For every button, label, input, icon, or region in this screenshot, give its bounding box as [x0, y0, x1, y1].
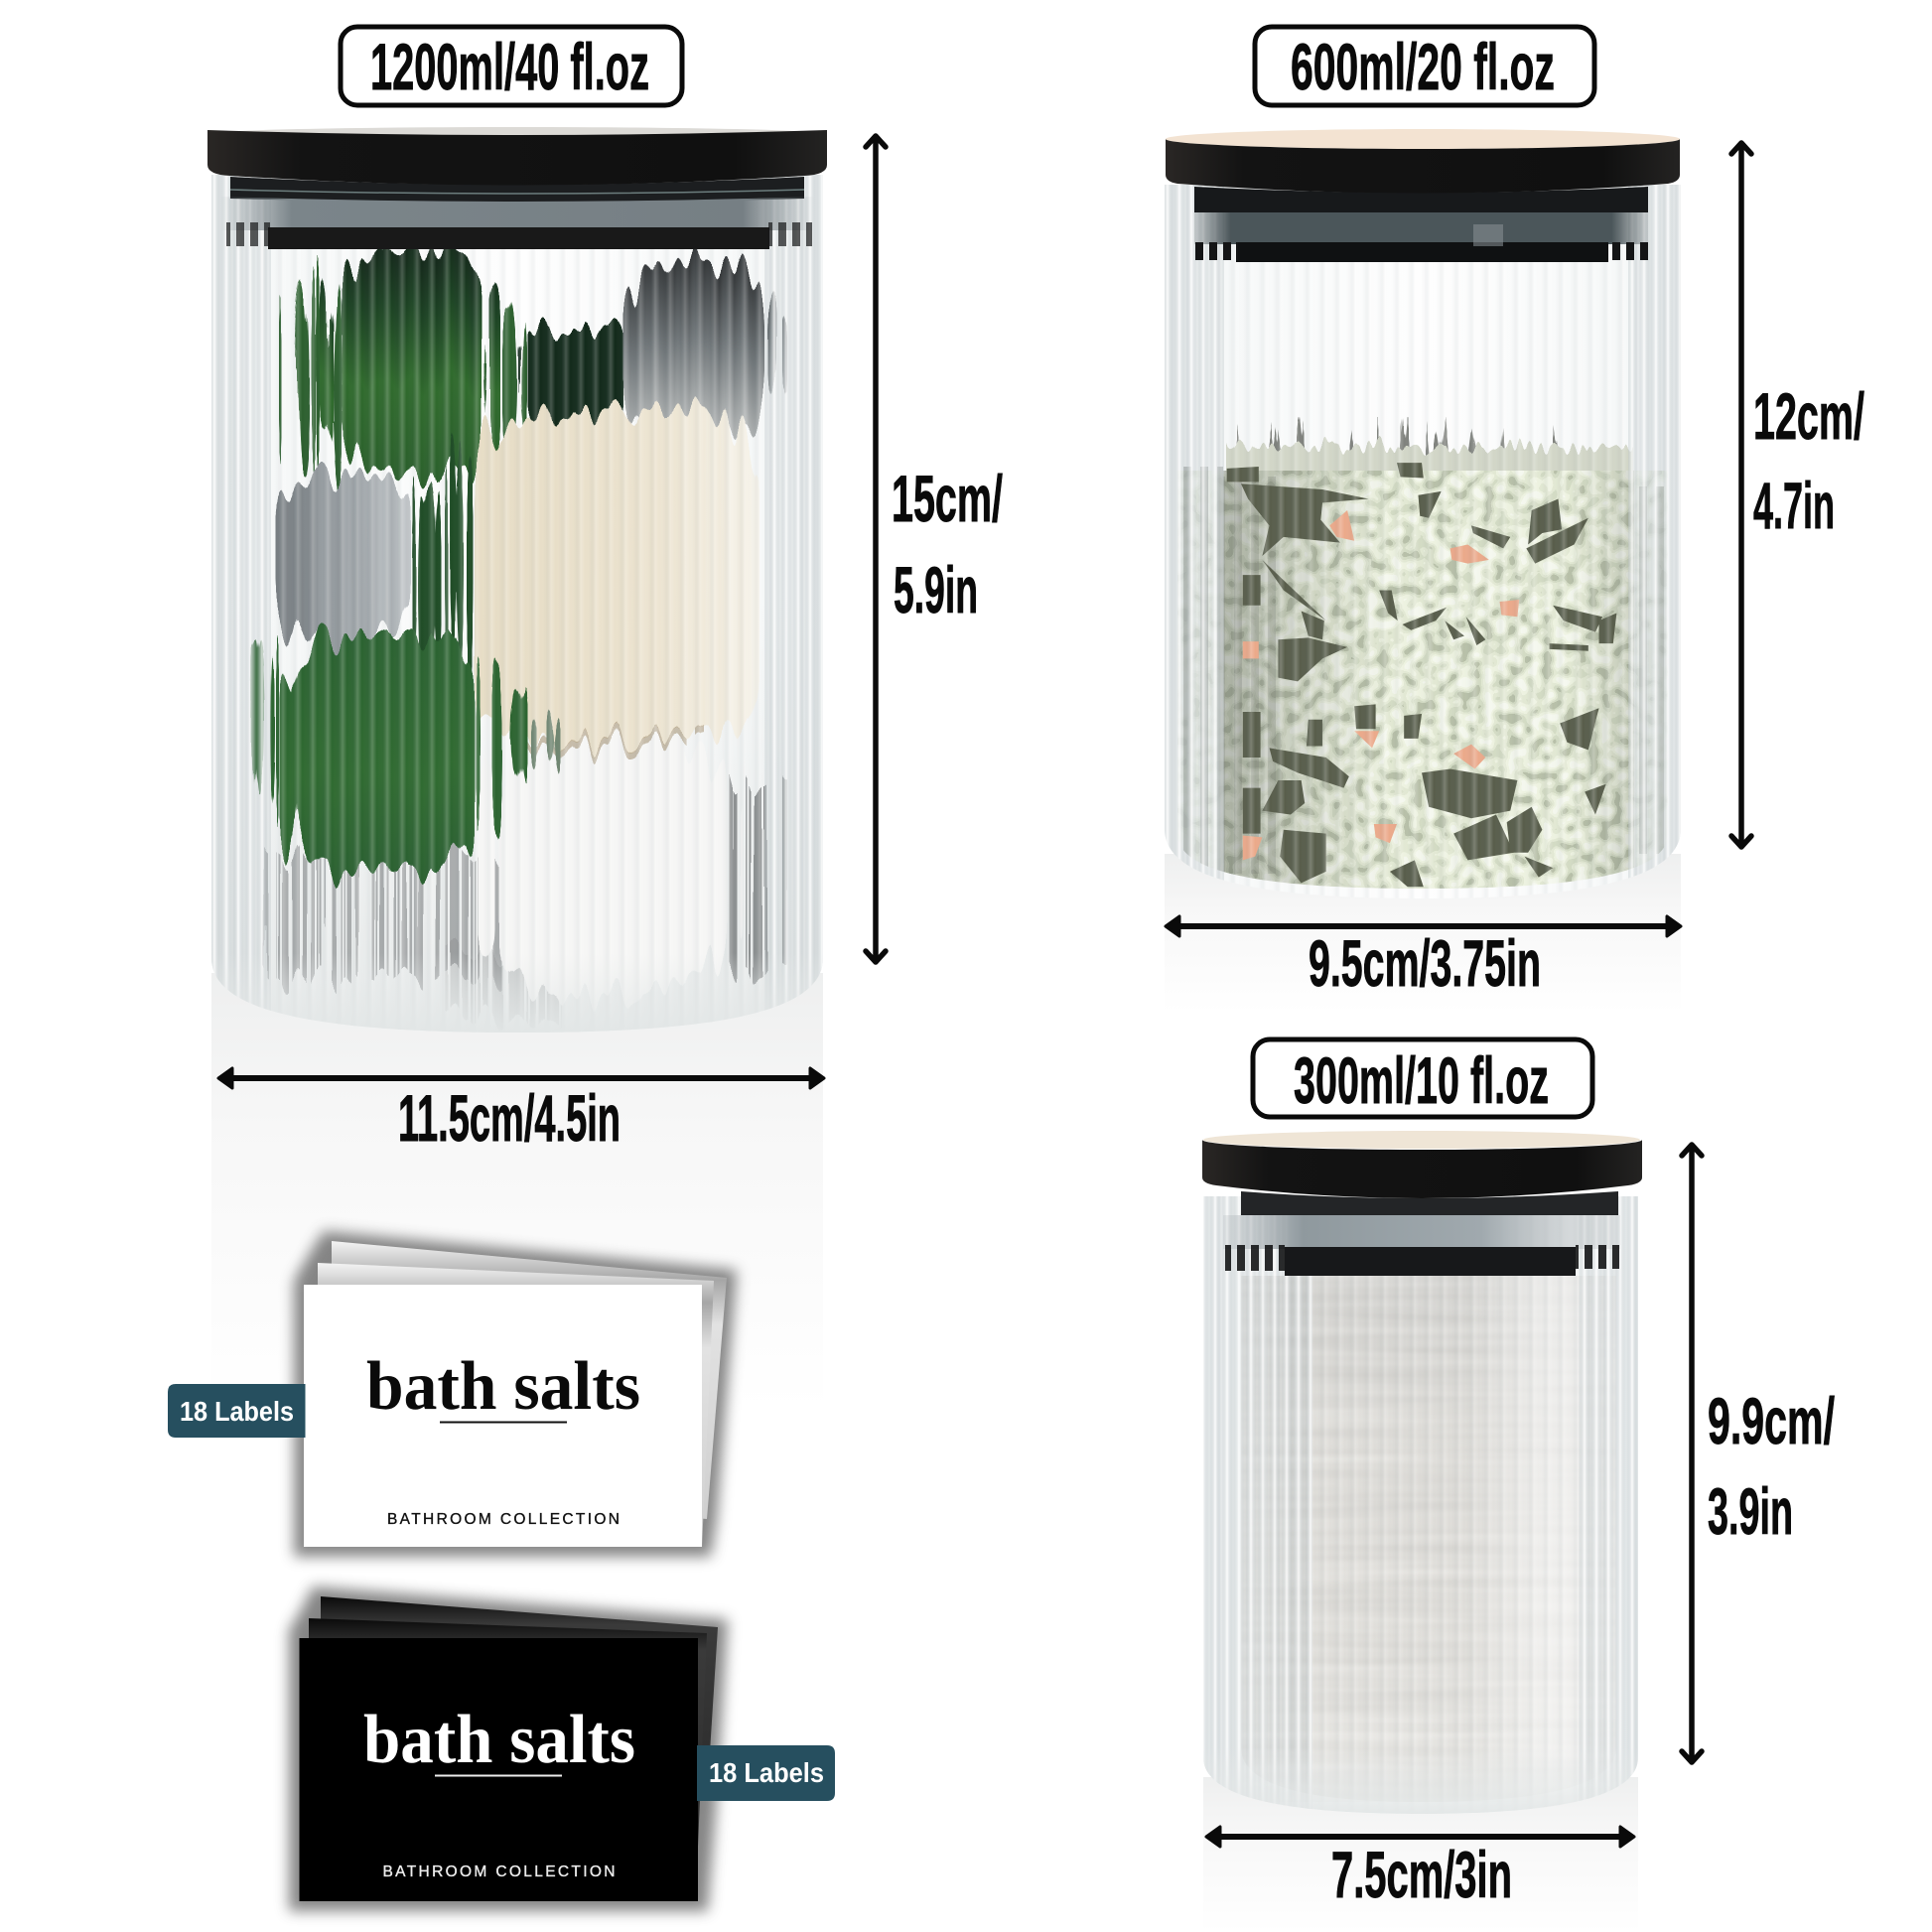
outer refracted salt	[1177, 471, 1223, 894]
tag: 18 labels white set: 18 Labels	[180, 1396, 294, 1427]
dimension: medium jar height: 4.7in	[1753, 469, 1835, 542]
large jar lid	[207, 127, 827, 185]
capacity label: 1200ml: 1200ml/40 fl.oz	[370, 30, 649, 103]
medium jar glass body	[1165, 185, 1681, 898]
back white card	[332, 1241, 727, 1519]
large jar glass body	[211, 175, 823, 1033]
dimension: small jar height	[1708, 1384, 1835, 1548]
dimension: large jar height	[892, 462, 1003, 626]
arrow: medium jar height	[1731, 143, 1751, 847]
middle black card	[309, 1618, 707, 1847]
back black card	[321, 1596, 718, 1799]
card title: bath salts	[363, 1702, 635, 1778]
salt herbs and pink grains	[1227, 463, 1616, 887]
small jar	[1202, 1131, 1642, 1817]
upper green spindles	[272, 263, 521, 482]
medium jar	[1165, 129, 1681, 899]
black label cards	[289, 1587, 728, 1911]
large jar neck band	[220, 177, 814, 249]
green strands	[415, 447, 468, 695]
small jar flutes	[1203, 1196, 1638, 1817]
tag: 18 labels black set: 18 Labels	[709, 1757, 824, 1788]
dimension: small jar width: 7.5cm/3in	[1331, 1838, 1512, 1911]
dimension: large jar height: 5.9in	[894, 553, 978, 626]
dimension: large jar width: 11.5cm/4.5in	[398, 1081, 621, 1155]
large jar flutes	[211, 175, 823, 1038]
capacity label: 1200ml	[341, 27, 682, 105]
middle white card	[318, 1263, 714, 1547]
small jar glass body	[1203, 1196, 1638, 1814]
medium jar bath salt	[1177, 413, 1668, 894]
tag: 18 labels black set	[697, 1745, 835, 1801]
capacity label: 600ml	[1255, 27, 1594, 105]
dark outer rib streaks	[1183, 467, 1223, 872]
salt side shading	[1223, 471, 1634, 894]
card underline	[435, 1775, 562, 1777]
large jar lower frosted glass	[244, 757, 792, 1007]
arrow: large jar width	[218, 1068, 824, 1088]
capacity label: 300ml	[1253, 1039, 1592, 1117]
white card shadow	[294, 1231, 737, 1557]
card title: bath salts	[366, 1348, 640, 1425]
white label cards	[294, 1231, 737, 1557]
card subtitle: BATHROOM COLLECTION	[383, 1863, 616, 1880]
reflection: medium jar	[1165, 854, 1681, 1013]
medium jar lid	[1166, 129, 1680, 193]
capacity label: 300ml: 300ml/10 fl.oz	[1294, 1043, 1549, 1117]
reflection: small jar	[1203, 1777, 1638, 1932]
dimension: small jar height: 3.9in	[1708, 1474, 1793, 1548]
black card shadow	[289, 1587, 728, 1911]
medium jar flutes	[1165, 185, 1681, 899]
large jar contents: bath bombs and soaps	[249, 251, 789, 1018]
tag: 18 labels white set	[168, 1384, 306, 1438]
arrow: small jar height	[1682, 1145, 1702, 1762]
card subtitle: BATHROOM COLLECTION	[387, 1511, 620, 1528]
arrow: small jar width	[1206, 1827, 1634, 1847]
small jar white salt	[1241, 1276, 1616, 1802]
front black card	[300, 1638, 698, 1901]
reflection: large jar	[211, 973, 823, 1410]
salt grains	[1223, 471, 1634, 894]
small jar neck band	[1223, 1191, 1620, 1276]
card underline	[440, 1422, 567, 1424]
medium jar neck band	[1194, 187, 1651, 262]
dimension: small jar height: 9.9cm/	[1708, 1384, 1835, 1457]
dimension: medium jar height	[1753, 379, 1864, 542]
large jar	[207, 127, 827, 1038]
dimension: medium jar width: 9.5cm/3.75in	[1309, 926, 1541, 1000]
small jar lid	[1202, 1131, 1642, 1198]
arrow: large jar height	[866, 136, 886, 962]
front white card	[304, 1285, 702, 1547]
salt top edge	[1226, 417, 1633, 471]
dimension: large jar height: 15cm/	[892, 462, 1003, 535]
arrow: medium jar width	[1166, 916, 1681, 936]
capacity label: 600ml: 600ml/20 fl.oz	[1291, 30, 1555, 103]
grey stripes under lower green	[260, 854, 498, 978]
